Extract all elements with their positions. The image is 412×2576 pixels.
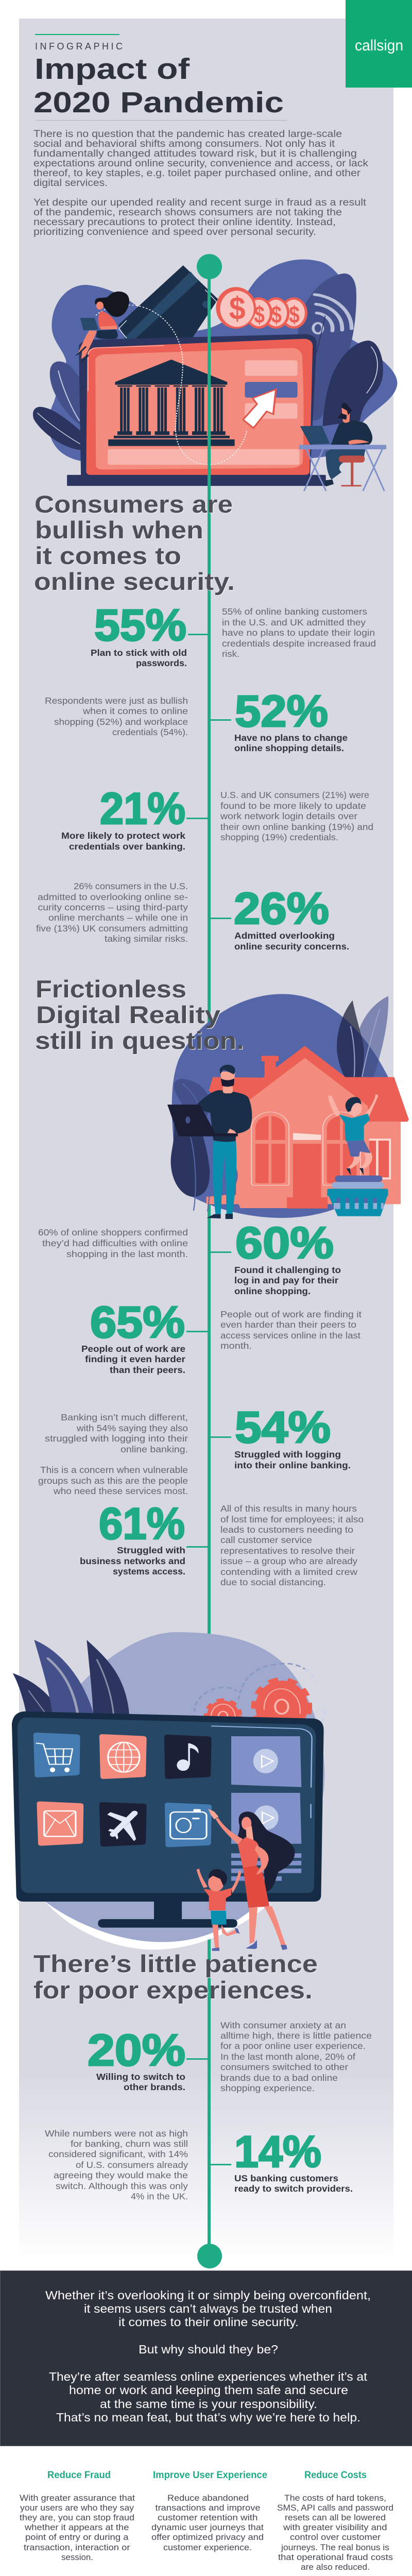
column: improve user experience: offer optimized privacy and [151, 2533, 264, 2542]
text: 26% detail: curity concerns – using third-party [38, 902, 188, 912]
stat: 21%: 21% [100, 784, 185, 834]
header accent rule [35, 34, 119, 35]
closing text [45, 2289, 371, 2424]
text: 26% detail: five (13%) UK consumers admitting [36, 923, 188, 934]
text: 21% detail [220, 790, 373, 842]
closing text: That’s no mean feat, but that’s why we’re here to help. [56, 2411, 360, 2424]
closing text: it seems users can’t always be trusted when [84, 2302, 332, 2315]
column: reduce fraud: point of entry or during a [25, 2533, 129, 2542]
text: 61% detail: representatives to resolve their [220, 1546, 355, 1556]
timeline top marker [197, 254, 222, 279]
timeline line [208, 276, 211, 2246]
column: reduce fraud: With greater assurance that [20, 2494, 135, 2503]
text: 60% detail [38, 1227, 188, 1259]
leaves [33, 274, 383, 450]
text: 26% detail: online merchants – while one in [48, 912, 188, 923]
text: 55% detail [222, 606, 376, 659]
stat: 14%: 14% [234, 2127, 321, 2177]
stat: 60%: Found it challenging to [234, 1265, 341, 1275]
icon: coins [216, 287, 307, 329]
icon: coins: $ [254, 301, 265, 328]
closing text: Whether it’s overlooking it or simply being overconfident, [45, 2289, 371, 2302]
column: reduce fraud: session. [61, 2553, 93, 2562]
stat: 52% [211, 687, 348, 753]
background panel [19, 19, 393, 2260]
woman on laptop [75, 292, 129, 362]
stat: 20%: 20% [88, 2026, 185, 2075]
text: 55% detail: in the U.S. and UK admitted they [222, 617, 366, 628]
child [197, 1869, 241, 1951]
heading: little patience: for poor experiences. [33, 1976, 313, 2004]
text: 20% detail: consumers switched to other [220, 2062, 348, 2072]
text: 60% detail: 60% of online shoppers confirmed [38, 1227, 188, 1238]
column: improve user experience: Improve User Experience [153, 2470, 267, 2481]
timeline bottom marker [197, 2244, 222, 2268]
closing text: at the same time is your responsibility. [100, 2397, 317, 2411]
text: 21% detail: U.S. and UK consumers (21%) were [220, 790, 369, 800]
text: 54% detail: This is a concern when vulnerable [40, 1465, 188, 1475]
stat: 55%: passwords. [136, 658, 187, 668]
stat: 26%: 26% [234, 884, 329, 934]
stat: 54%: into their online banking. [234, 1460, 351, 1470]
column: reduce costs: with greater visibility and [283, 2523, 387, 2532]
text: 65% detail: month. [220, 1341, 252, 1351]
column: improve user experience: customer experience. [163, 2543, 252, 2552]
dark closing panel [0, 2271, 412, 2446]
stat: 60%: 60% [235, 1218, 334, 1268]
text: 52% detail [45, 696, 188, 737]
stat: 21% [61, 784, 208, 852]
stat: 21%: More likely to protect work [61, 831, 185, 841]
icon: coins: $ [229, 291, 246, 327]
stat: 61% [80, 1499, 208, 1577]
stat: 61%: 61% [99, 1499, 185, 1549]
column: reduce fraud: transaction, interaction or [24, 2543, 130, 2552]
text: 14% detail: switch. Although this was only [56, 2181, 188, 2191]
logo block [346, 0, 412, 88]
text: 14% detail: 4% in the UK. [131, 2191, 188, 2201]
intro text: of the pandemic, research shows consumers are not taking the [33, 207, 342, 218]
text: 61% detail: All of this results in many hours [220, 1503, 357, 1514]
icon: wifi signal [313, 295, 352, 352]
man at desk [299, 403, 386, 490]
column: improve user experience: customer retention with [158, 2513, 258, 2522]
stat: 26%: online security concerns. [234, 941, 349, 952]
text: 14% detail: of U.S. consumers already [76, 2160, 188, 2170]
text: 55% detail: risk. [222, 649, 239, 659]
stat: 14%: US banking customers [234, 2173, 338, 2183]
house [207, 1046, 409, 1209]
text: 65% detail: even harder than their peers to [220, 1319, 356, 1330]
heading: consumers are bullish: Consumers are [35, 490, 233, 518]
heading: frictionless digital reality: Digital Reality [36, 1001, 220, 1028]
text: 20% detail: With consumer anxiety at an [220, 2020, 346, 2030]
stat: 14% [211, 2127, 353, 2194]
text: 26% detail: 26% consumers in the U.S. [74, 881, 188, 891]
column: reduce costs: control over customer [290, 2533, 381, 2542]
stat: 55%: 55% [94, 601, 186, 650]
heading: frictionless digital reality: Frictionless [36, 975, 186, 1003]
stat: 55%: Plan to stick with old [91, 648, 187, 658]
stat: 26%: Admitted overlooking [234, 930, 335, 941]
stat: 65%: People out of work are [81, 1344, 185, 1354]
stat: 61%: systems access. [113, 1566, 185, 1577]
column: reduce fraud: Reduce Fraud [47, 2470, 111, 2481]
intro text: necessary precautions to protect their online identity. Instead, [33, 217, 336, 228]
laptop [67, 334, 326, 486]
heading: consumers are bullish: it comes to [35, 542, 181, 569]
text: 54% detail [38, 1412, 188, 1496]
column: improve user experience: transactions and improve [156, 2503, 261, 2513]
text: 14% detail [45, 2128, 188, 2201]
stat: 60%: online shopping. [234, 1286, 311, 1296]
text: 61% detail [220, 1503, 364, 1587]
intro text: expectations around online security, convenience and access, or lack [33, 158, 369, 169]
blue blob and back leaves [172, 994, 389, 1218]
gears [195, 1664, 324, 1733]
stat: 21%: credentials over banking. [69, 841, 185, 852]
text: 52% detail: Respondents were just as bullish [45, 696, 188, 706]
dotted path [96, 305, 247, 465]
text: 54% detail: who need these services most. [53, 1486, 188, 1496]
text: 21% detail: found to be more likely to update [220, 801, 366, 811]
icon: coins: $ [271, 301, 282, 328]
intro text: digital services. [33, 178, 108, 189]
text: 14% detail: While numbers were not as high [45, 2128, 188, 2139]
stat: 52%: 52% [235, 687, 328, 736]
boy jumping [329, 1094, 379, 1176]
blue background blobs [48, 260, 397, 470]
column: reduce costs: that operational fraud costs [278, 2553, 393, 2562]
stat: 54% [211, 1403, 351, 1470]
text: 14% detail: agreeing they would make the [54, 2170, 188, 2180]
text: 65% detail [220, 1309, 362, 1351]
closing text: home or work and keeping them safe and secure [69, 2383, 348, 2397]
column: reduce fraud: they are, you can stop fraud [20, 2513, 134, 2522]
text: 61% detail: issue – a group who are already [220, 1556, 357, 1566]
intro text: fundamentally changed attitudes toward risk, but it is challenging [33, 148, 357, 159]
column: reduce costs: SMS, API calls and password [277, 2503, 393, 2513]
column: reduce fraud: whether it appears at the [24, 2523, 129, 2532]
text: 61% detail: contending with a limited crew [220, 1567, 357, 1577]
text: 61% detail: leads to customers needing to [220, 1524, 353, 1535]
stat: 65%: 65% [90, 1298, 185, 1347]
text: 54% detail: online banking. [121, 1444, 188, 1454]
heading: little patience: There’s little patience [33, 1950, 318, 1977]
stat: 65%: than their peers. [110, 1365, 185, 1375]
column: reduce fraud [20, 2470, 135, 2562]
text: 54% detail: struggled with logging into their [45, 1433, 188, 1444]
bank card [118, 265, 218, 338]
text: 61% detail: of lost time for employees; it also [220, 1514, 364, 1524]
stat: 61%: Struggled with [117, 1545, 185, 1555]
title: Impact of [35, 53, 190, 86]
app tile: mail [37, 1801, 83, 1846]
text: 14% detail: for banking, churn was still [71, 2139, 188, 2149]
text: 65% detail: access services online in the last [220, 1330, 360, 1341]
column: improve user experience [151, 2470, 267, 2552]
heading: consumers are bullish: online security. [34, 568, 235, 595]
heading: consumers are bullish: bullish when [35, 516, 203, 544]
heading: little patience [33, 1950, 318, 2004]
heading: frictionless digital reality [35, 975, 244, 1054]
text: 60% detail: shopping in the last month. [66, 1249, 188, 1259]
stat: 54%: Struggled with logging [234, 1449, 341, 1460]
column: reduce fraud: your users are who they say [20, 2503, 134, 2513]
text: 55% detail: credentials despite increased fraud [222, 638, 376, 649]
column: reduce costs: Reduce Costs [304, 2470, 367, 2481]
text: 20% detail: In the last month alone, 20% of [220, 2052, 355, 2062]
text: 52% detail: when it comes to online [82, 706, 188, 716]
column: improve user experience: Reduce abandoned [167, 2494, 249, 2503]
icon: coins: $ [289, 301, 300, 328]
text: 52% detail: shopping (52%) and workplace [54, 717, 188, 727]
eyebrow: infographic: INFOGRAPHIC [35, 41, 123, 52]
text: 52% detail: credentials (54%). [112, 727, 188, 737]
stat: 20%: other brands. [124, 2082, 185, 2092]
text: 21% detail: shopping (19%) credentials. [220, 832, 338, 842]
text: 26% detail: taking similar risks. [105, 934, 188, 944]
closing text: it comes to their online security. [118, 2315, 299, 2329]
text: 61% detail: call customer service [220, 1535, 312, 1545]
column: reduce costs: journeys. The real bonus is [281, 2543, 389, 2552]
text: 20% detail: shopping experience. [220, 2083, 315, 2093]
stat: 20%: Willing to switch to [96, 2072, 185, 2082]
stat: 61%: business networks and [80, 1556, 185, 1566]
column: reduce costs: resets can all be lowered [285, 2513, 386, 2522]
app tile: globe [99, 1734, 147, 1779]
text: 20% detail: alltime high, there is little patience [220, 2030, 372, 2041]
column: reduce costs: are also reduced. [301, 2563, 370, 2572]
intro text: Yet despite our upended reality and recent surge in fraud as a result [33, 197, 367, 208]
intro text: thereof, to key staples, e.g. toilet paper purchased online, and other [33, 168, 361, 179]
stat: 52%: online shopping details. [234, 743, 344, 753]
closing text: They’re after seamless online experiences whether it’s at [49, 2370, 367, 2383]
stat: 52%: Have no plans to change [234, 733, 348, 743]
text: 54% detail: groups such as this are the people [38, 1476, 188, 1486]
stat: 60% [211, 1218, 341, 1296]
text: 54% detail: with 54% saying they also [76, 1423, 188, 1433]
text: 20% detail [220, 2020, 372, 2093]
woman pointing [208, 1809, 295, 1950]
text: 26% detail: admitted to overlooking online se- [38, 892, 188, 902]
column: reduce costs [277, 2470, 393, 2572]
text: 54% detail: Banking isn’t much different, [61, 1412, 188, 1422]
light blob with white arc [40, 1632, 324, 1950]
illustration: family at home [167, 994, 409, 1219]
app tile: camera [165, 1803, 212, 1847]
app tile: music [164, 1735, 212, 1779]
closing text: But why should they be? [139, 2343, 278, 2356]
app tile: cart [33, 1733, 80, 1777]
icon: cursor arrow [243, 389, 276, 428]
leaves beside man [171, 1079, 238, 1212]
intro text: prioritizing convenience and speed over personal security. [33, 227, 316, 238]
stat: 55% [91, 601, 208, 668]
text: 21% detail: their own online banking (19%) and [220, 822, 373, 832]
man with laptop [167, 1065, 252, 1219]
text: 20% detail: for a poor online user experience. [220, 2041, 366, 2051]
column: reduce costs: The costs of hard tokens, [284, 2494, 386, 2503]
stat: 60%: log in and pay for their [234, 1275, 338, 1285]
text: 21% detail: work network login details over [220, 811, 357, 821]
title [33, 53, 284, 119]
heading: frictionless digital reality: still in question. [35, 1027, 244, 1054]
laundry basket [327, 1176, 388, 1216]
illustration: laptop with bank and people [33, 260, 397, 490]
stat: 65% [81, 1298, 208, 1375]
stat: 65%: finding it even harder [85, 1354, 185, 1364]
stat: 26% [211, 884, 349, 952]
title: 2020 Pandemic [33, 86, 284, 119]
app tile: video one [231, 1736, 301, 1787]
column: improve user experience: dynamic user journeys that [151, 2523, 264, 2532]
text: 60% detail: they’d had difficulties with online [42, 1238, 188, 1248]
text: 20% detail: brands due to a bad online [220, 2073, 338, 2083]
illustration: TV with apps and family [12, 1632, 324, 1951]
text: 55% detail: 55% of online banking customers [222, 606, 367, 617]
text: 65% detail: People out of work are finding it [220, 1309, 362, 1319]
app tile: video two [231, 1793, 301, 1881]
leaves [12, 1640, 129, 1715]
title rule [36, 120, 287, 121]
intro text [33, 129, 369, 238]
icon: bank building [108, 360, 235, 446]
stat: 14%: ready to switch providers. [234, 2183, 353, 2194]
heading: consumers are bullish [34, 490, 235, 595]
stat: 54%: 54% [235, 1403, 331, 1452]
intro text: social and behavioral shifts among consumers. Not only has it [33, 139, 335, 149]
app tile: plane [99, 1802, 147, 1846]
stat: 20% [88, 2026, 208, 2092]
intro text: There is no question that the pandemic has created large-scale [33, 129, 342, 140]
text: 26% detail [36, 881, 188, 944]
text: 55% detail: have no plans to update their login [222, 628, 375, 638]
text: 14% detail: considered significant, with 14% [48, 2149, 188, 2159]
television [12, 1711, 324, 1928]
callsign logo: callsign [355, 37, 403, 54]
text: 61% detail: due to social distancing. [220, 1577, 326, 1587]
